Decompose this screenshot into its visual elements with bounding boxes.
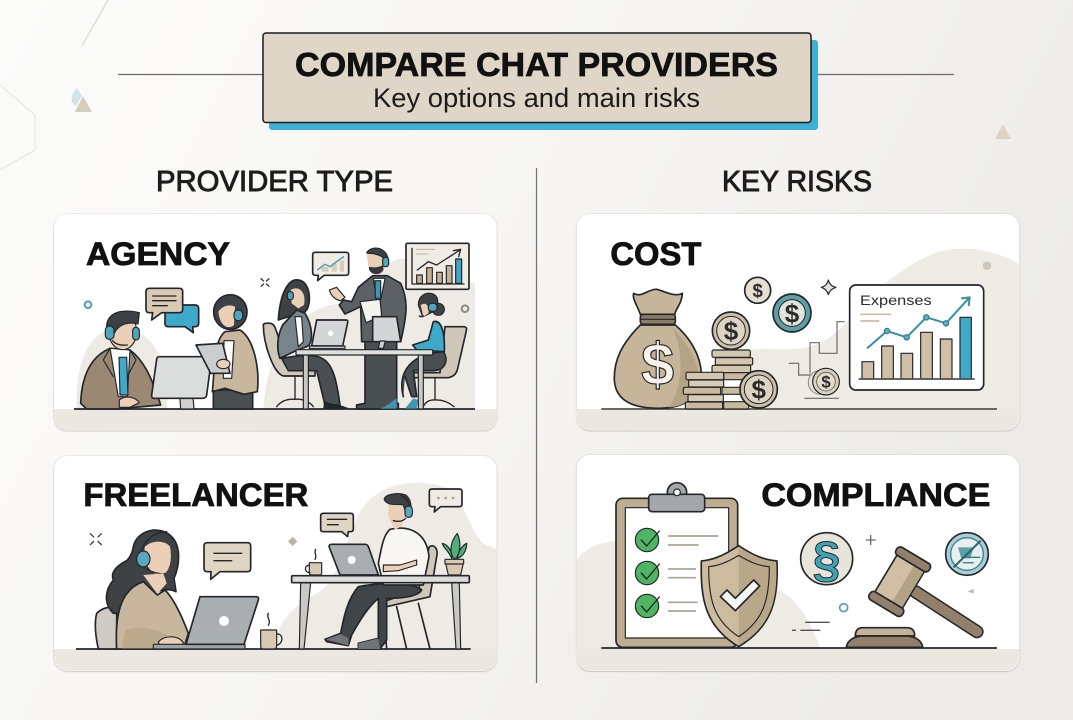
man's chat bubbles xyxy=(321,489,462,537)
expenses chart xyxy=(850,285,984,390)
decorative corner shapes xyxy=(0,0,1011,170)
desktop monitor xyxy=(152,357,211,409)
coins: $ xyxy=(785,298,800,328)
chart bubble xyxy=(313,252,349,281)
chat bubbles xyxy=(146,288,199,333)
framed bar chart xyxy=(406,243,469,289)
heading: agency: AGENCY xyxy=(86,235,230,272)
seated woman in blue xyxy=(380,293,467,409)
desk mug xyxy=(305,549,322,575)
woman's coffee mug xyxy=(261,613,282,649)
stepped connector lines xyxy=(789,322,845,398)
heading: compliance: COMPLIANCE xyxy=(761,477,990,513)
money bag: $ xyxy=(641,330,674,397)
chair and man at desk xyxy=(325,494,437,649)
accent marks xyxy=(90,533,297,546)
coin stacks xyxy=(683,350,753,409)
subtitle: Key options and main risks xyxy=(373,83,700,113)
title: COMPARE CHAT PROVIDERS xyxy=(295,46,778,83)
column divider xyxy=(536,168,538,683)
title banner xyxy=(263,33,818,130)
coins: $ xyxy=(821,373,831,392)
sparkle and dot xyxy=(821,261,991,295)
expenses chart: Expenses xyxy=(860,292,932,308)
panel: agency xyxy=(54,214,497,432)
section symbol badge: § xyxy=(813,532,841,588)
standing woman with clipboard xyxy=(196,295,258,409)
coins xyxy=(712,277,839,408)
seated woman with laptop xyxy=(263,280,349,409)
coins: $ xyxy=(751,375,766,405)
man's laptop xyxy=(329,544,378,575)
woman with headset and laptop xyxy=(95,530,188,649)
woman's chat bubble xyxy=(204,543,251,579)
header rules xyxy=(118,74,954,76)
woman's laptop xyxy=(153,597,259,649)
panel: freelancer xyxy=(54,456,498,672)
plus and circle marks xyxy=(792,535,974,630)
desk xyxy=(292,576,469,649)
money bag xyxy=(614,289,701,408)
seated man with headset xyxy=(81,311,161,409)
section symbol badge xyxy=(801,532,853,588)
shield xyxy=(701,546,777,647)
heading: freelancer: FREELANCER xyxy=(83,477,308,513)
gavel xyxy=(846,545,977,647)
standing man presenting xyxy=(329,248,406,409)
panel: compliance xyxy=(576,455,1021,672)
panel: cost xyxy=(576,214,1021,432)
heading: cost: COST xyxy=(610,235,701,272)
laptop logo xyxy=(348,556,356,564)
potted plant xyxy=(442,533,467,575)
column heading: key risks: KEY RISKS xyxy=(722,166,872,198)
clipboard checklist xyxy=(616,483,738,647)
coins: $ xyxy=(724,316,739,346)
no-document badge xyxy=(946,533,988,575)
accent circles xyxy=(85,278,468,312)
meeting table xyxy=(296,350,433,409)
column heading: provider type: PROVIDER TYPE xyxy=(156,166,393,198)
coins: $ xyxy=(752,280,763,301)
